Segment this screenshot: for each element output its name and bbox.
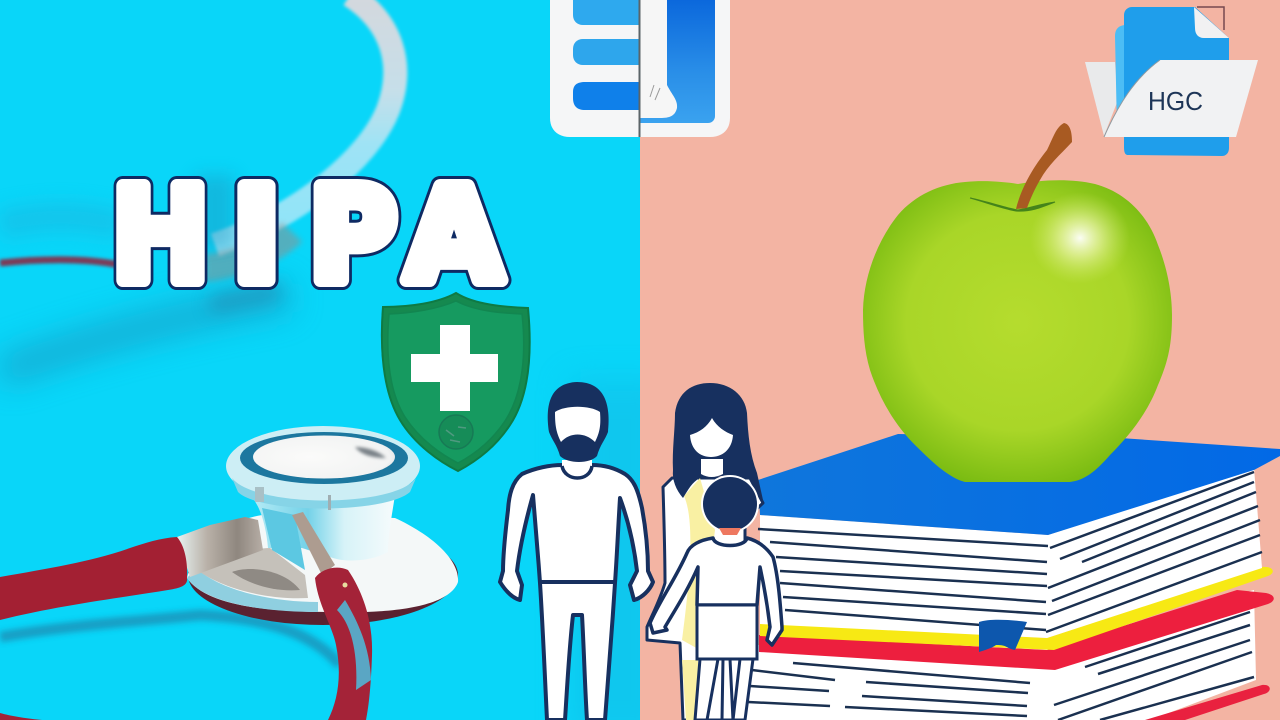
bookmark bbox=[979, 620, 1027, 652]
list bar 3 bbox=[573, 82, 640, 110]
panel: education background bbox=[640, 0, 1280, 720]
title: HIPA: A bbox=[406, 160, 502, 310]
title: HIPA bbox=[112, 160, 502, 311]
title: HIPA: I bbox=[232, 161, 280, 311]
list bar 1 bbox=[573, 0, 640, 25]
yellow ribbon bbox=[760, 567, 1273, 650]
lower book bbox=[745, 590, 1270, 720]
red cover bbox=[759, 590, 1274, 670]
icon: green medical shield bbox=[382, 293, 530, 471]
icon: book stack bbox=[745, 434, 1280, 720]
lower diaphragm bbox=[188, 525, 458, 625]
icon: stethoscope chest piece bbox=[0, 426, 458, 665]
folder label: HGC bbox=[1148, 86, 1203, 116]
title: HIPA: I bbox=[232, 161, 280, 311]
blue panel bbox=[640, 0, 715, 123]
icon: stethoscope tube and connector bbox=[0, 512, 372, 720]
panel: healthcare background bbox=[0, 0, 670, 720]
stem bbox=[250, 495, 395, 560]
title: HIPA: A bbox=[406, 160, 502, 310]
icon: child figure bbox=[650, 475, 782, 720]
list bar 2 bbox=[573, 39, 640, 65]
blue top cover bbox=[758, 434, 1280, 535]
icon: woman figure bbox=[647, 383, 763, 720]
title: HIPA: P bbox=[309, 161, 397, 311]
icon: green apple bbox=[863, 123, 1172, 482]
title: HIPA: P bbox=[309, 161, 397, 311]
icon: document list card bbox=[550, 0, 730, 137]
top ring bbox=[226, 426, 420, 506]
blurred stethoscope tube bbox=[0, 0, 395, 372]
upper pages bbox=[760, 468, 1262, 638]
title: HIPA: H bbox=[112, 160, 209, 310]
title: HIPA: H bbox=[112, 160, 209, 310]
icon: man figure bbox=[500, 382, 653, 720]
icon: folder with blue file bbox=[1085, 7, 1258, 156]
